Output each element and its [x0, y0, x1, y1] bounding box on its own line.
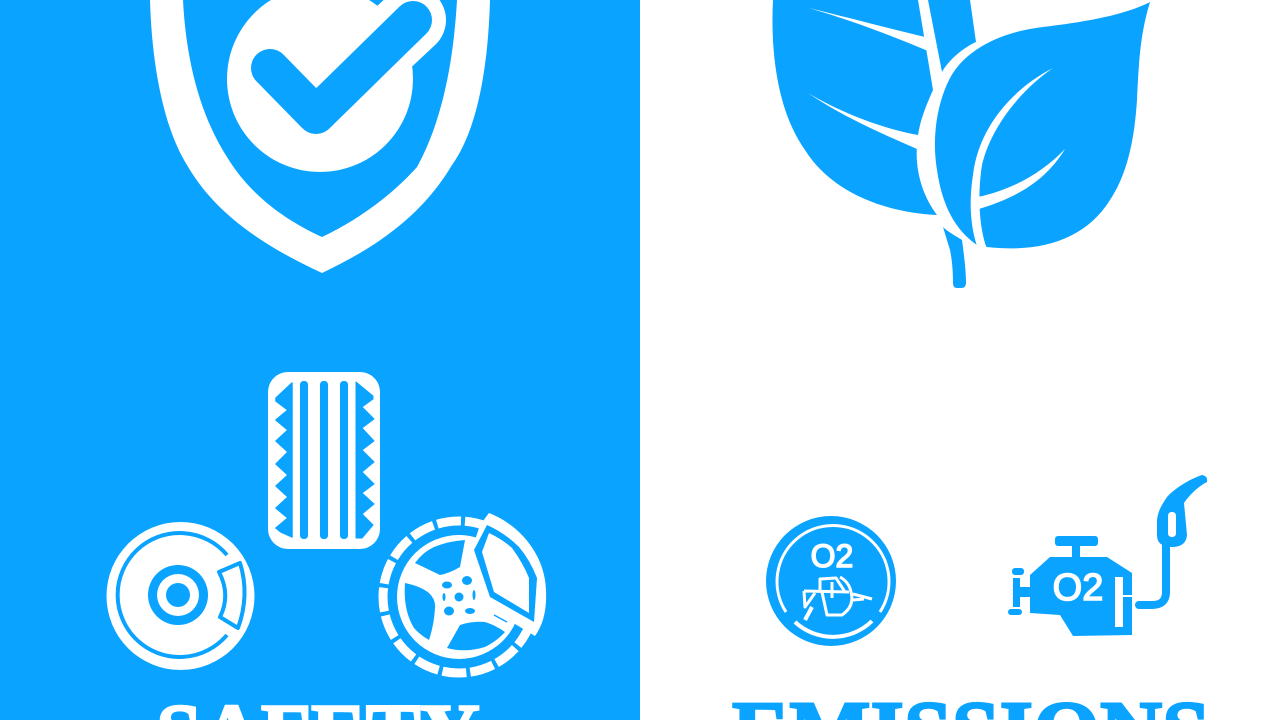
icon: small nozzle outline — [804, 577, 872, 620]
icon: engine with fuel nozzle — [1008, 475, 1207, 636]
icon: tire tread — [268, 372, 380, 549]
panel: emissions — [640, 0, 1280, 720]
icon: shield with check mark — [150, 0, 490, 273]
icon: O2 badge with nozzle — [766, 516, 896, 646]
nozzle — [1157, 475, 1207, 547]
label: O2 on engine: O2 — [1053, 567, 1103, 609]
icon: brake disc — [106, 522, 254, 670]
hose — [1139, 540, 1166, 605]
icon: alloy wheel with caliper — [383, 513, 546, 673]
icon: leaves — [772, 0, 1150, 288]
panel: safety — [0, 0, 640, 720]
label: O2 in badge: O2 — [811, 538, 853, 574]
